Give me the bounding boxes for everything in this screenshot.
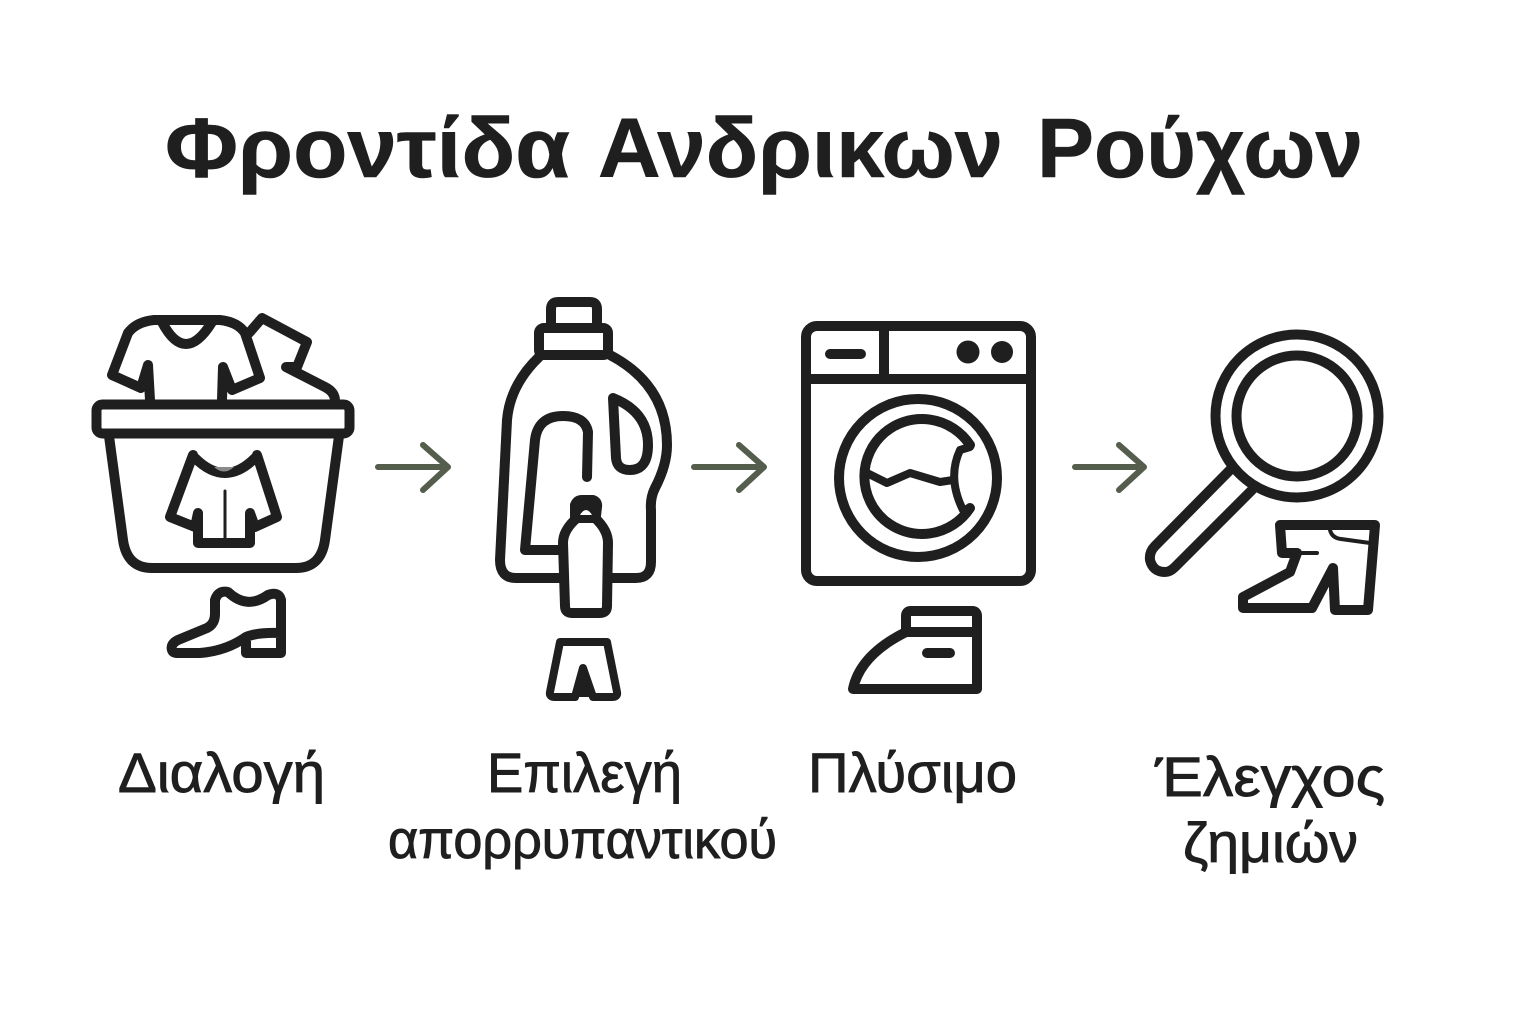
machine knobs [956, 340, 1013, 364]
label: damage inspection [1154, 745, 1385, 874]
machine drum [864, 419, 970, 534]
label: detergent selection: απορρυπαντικού [388, 810, 777, 870]
icon: laundry basket with clothes and shoe [96, 318, 350, 653]
label: detergent selection [388, 741, 777, 870]
bottle label handle [525, 416, 588, 550]
basket body [109, 436, 339, 568]
bottle collar [539, 328, 608, 355]
bottle grip [613, 398, 648, 470]
title: Φροντίδα [165, 101, 570, 195]
arrow: detergent to wash [694, 445, 764, 490]
title [165, 101, 1363, 195]
machine door [839, 399, 997, 557]
drum water [867, 447, 970, 510]
icon: iron [853, 611, 977, 689]
small bottle [563, 500, 608, 613]
title: Ανδρικων [598, 101, 1003, 195]
icon: shirt on basket [170, 455, 277, 543]
handle [1150, 470, 1252, 572]
label: damage inspection: ζημιών [1183, 811, 1358, 874]
lens outer ring [1216, 334, 1378, 498]
bottle body [500, 355, 667, 578]
icon: shoe [172, 592, 281, 653]
label: washing: Πλύσιμο [808, 741, 1017, 804]
bottle cap [551, 302, 597, 325]
arrow: wash to inspection [1075, 445, 1144, 490]
icon: t-shirt in basket [112, 320, 260, 400]
icon: washing machine and iron [806, 326, 1031, 689]
label: sorting: Διαλογή [118, 741, 325, 804]
machine body [806, 326, 1031, 581]
icon: folded shirt behind [249, 318, 335, 401]
label: damage inspection: Έλεγχος [1154, 745, 1385, 808]
label: detergent selection: Επιλεγή [487, 741, 682, 804]
arrow: sorting to detergent [378, 445, 448, 490]
control panel [806, 326, 1031, 379]
icon: detergent bottle with small bottle and shorts [500, 302, 667, 697]
icon: shorts [550, 642, 617, 697]
icon: magnifying glass with boot [1150, 334, 1378, 610]
title: Ρούχων [1037, 101, 1363, 195]
basket rim [96, 404, 350, 434]
icon: boot [1243, 525, 1375, 610]
lens inner ring [1236, 356, 1358, 476]
